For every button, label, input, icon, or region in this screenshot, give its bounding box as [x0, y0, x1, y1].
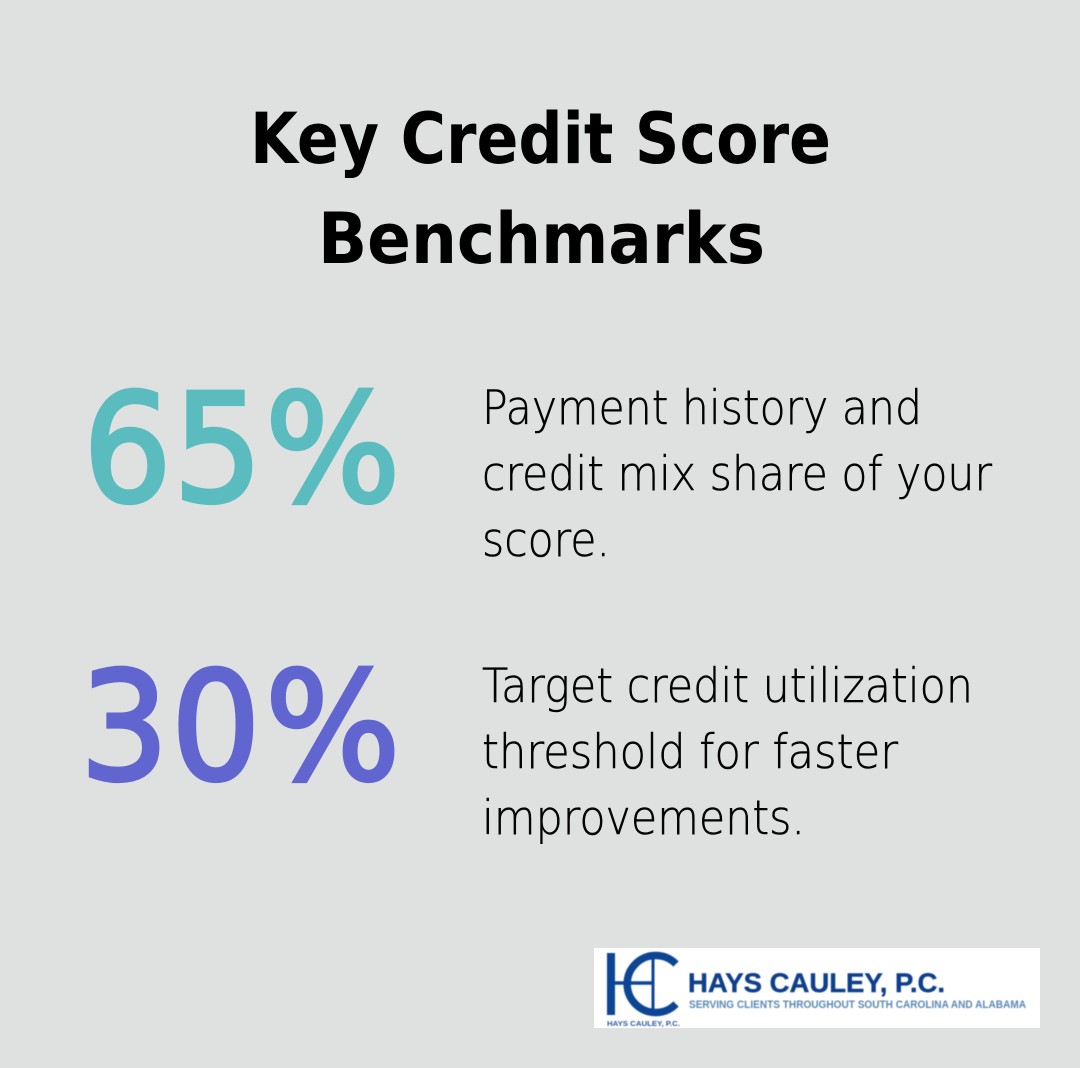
stat: 65%: 5 — [173, 363, 263, 537]
description: credit utilization: Target credit utilization — [482, 659, 973, 714]
description: credit utilization: threshold for faster — [482, 725, 899, 780]
title — [250, 98, 831, 280]
title: Key Credit Score — [250, 98, 831, 180]
stat: 30%: 0 — [171, 641, 261, 815]
description: payment history: score. — [482, 513, 610, 568]
description: payment history: credit mix share of your — [482, 447, 993, 502]
stat: 30% — [80, 640, 400, 815]
stat: 65% — [83, 362, 400, 537]
small caption: HAYS CAULEY, P.C. — [607, 1019, 680, 1028]
title: Benchmarks — [318, 198, 765, 280]
description: credit utilization — [482, 659, 973, 846]
description: payment history: Payment history and — [482, 381, 922, 436]
stat: 30%: 3 — [80, 641, 169, 815]
description: credit utilization: improvements. — [482, 791, 805, 846]
tagline: SERVING CLIENTS THROUGHOUT SOUTH CAROLINA AND ALABAMA — [689, 999, 1026, 1011]
stat: 30%: % — [265, 640, 400, 815]
company name: HAYS CAULEY, P.C. — [688, 968, 945, 998]
logo: Hays Cauley — [594, 948, 1040, 1028]
description: payment history — [482, 381, 993, 568]
stat: 65%: 6 — [83, 363, 172, 537]
icon: HC monogram — [611, 953, 676, 1015]
stat: 65%: % — [265, 362, 400, 537]
